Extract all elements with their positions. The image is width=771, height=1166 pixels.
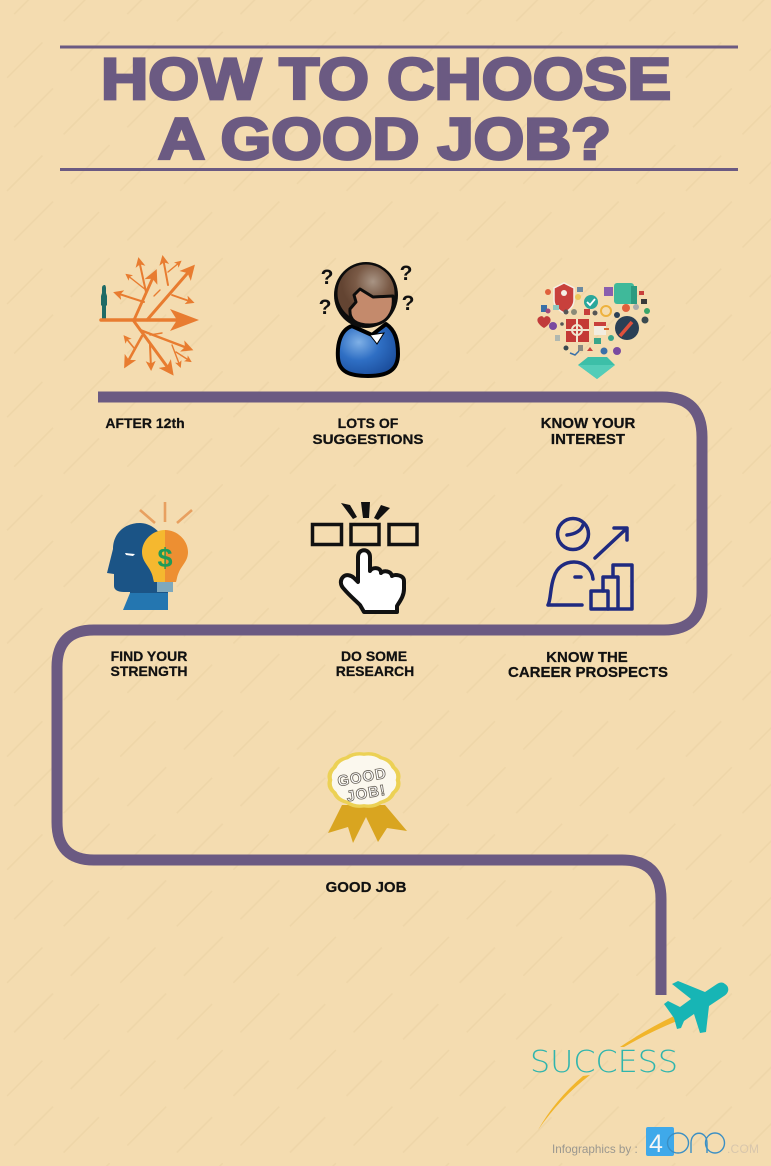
title: A GOOD JOB? — [158, 107, 611, 172]
icon: small figure — [101, 285, 107, 320]
label: do some research: RESEARCH — [336, 663, 414, 679]
question marks: ? — [400, 262, 412, 285]
winding path — [57, 397, 702, 995]
icon: good job badge: JOB! — [345, 782, 387, 805]
icon: confused person — [319, 262, 414, 376]
label: know your interest: INTEREST — [551, 431, 625, 448]
credit: infographics by 4ono.com: 4 — [649, 1130, 663, 1158]
label: after 12th: AFTER 12th — [105, 415, 185, 431]
label: know the career prospects: CAREER PROSPECTS — [508, 664, 668, 681]
question marks: ? — [319, 296, 331, 319]
title: HOW TO CHOOSE — [101, 47, 671, 112]
icon: branching arrows — [101, 258, 199, 372]
icon: person with rising chart — [548, 518, 632, 609]
credit: infographics by 4ono.com: .COM — [727, 1142, 759, 1156]
credit: infographics by 4ono.com: Infographics by : — [552, 1143, 638, 1156]
icon: heart of small icons — [537, 283, 650, 379]
credit: infographics by 4ono.com — [552, 1127, 759, 1158]
label: good job: GOOD JOB — [326, 879, 407, 896]
label: find your strength: FIND YOUR — [111, 648, 187, 664]
question marks: ? — [402, 292, 414, 315]
question marks — [319, 262, 414, 319]
icon: airplane with trail — [538, 981, 728, 1130]
success label: SUCCESS — [530, 1045, 678, 1080]
icon: good job badge: GOOD — [336, 765, 388, 790]
icon: head with light bulb — [107, 502, 192, 610]
label: lots of suggestions: SUGGESTIONS — [312, 431, 424, 447]
icon: good job badge — [327, 752, 407, 843]
label: lots of suggestions: LOTS OF — [338, 415, 399, 431]
title — [60, 46, 738, 172]
icon: pointing hand and boxes — [312, 502, 417, 612]
label: know your interest: KNOW YOUR — [541, 415, 636, 432]
label: do some research: DO SOME — [341, 648, 407, 664]
label: find your strength: STRENGTH — [110, 663, 188, 679]
label: know the career prospects: KNOW THE — [546, 649, 628, 666]
question marks: ? — [321, 266, 333, 289]
icon: head with light bulb: $ — [157, 543, 173, 573]
